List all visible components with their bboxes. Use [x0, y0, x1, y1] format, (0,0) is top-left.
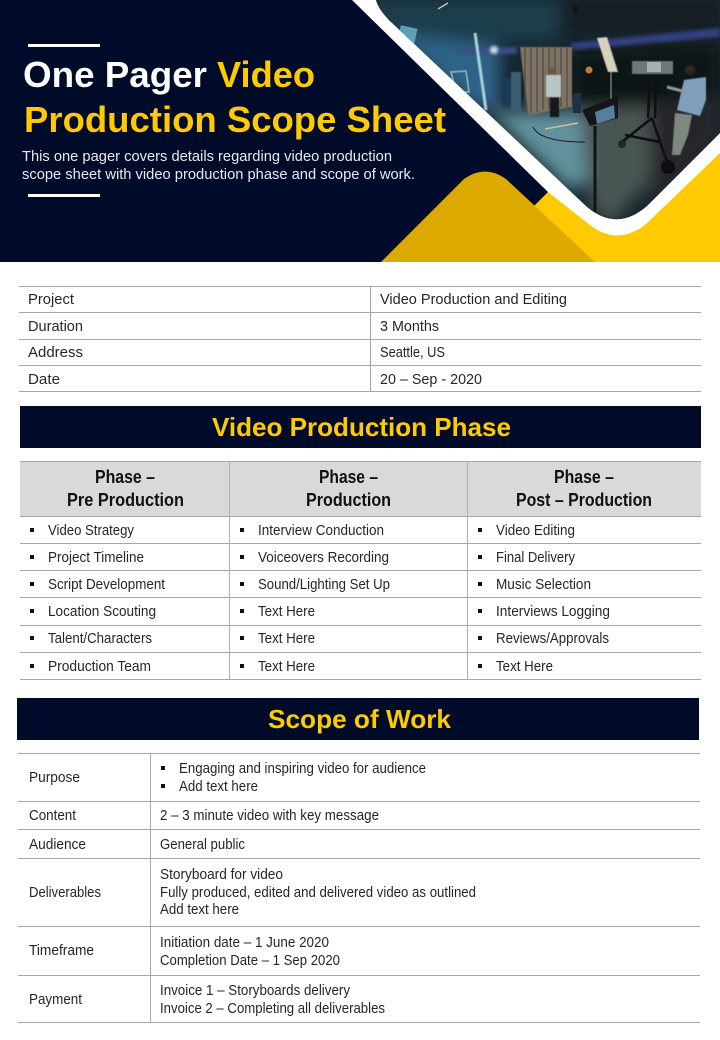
project info table: Seattle, US: [380, 345, 445, 361]
floor glow strip and cables: [545, 123, 578, 129]
row: deliverables: Add text here: [160, 902, 239, 918]
column 2 items: Sound/Lighting Set Up: [258, 577, 390, 593]
column 3 items: [496, 523, 610, 675]
row: timeframe: Timeframe: [29, 943, 94, 959]
project info table: 20 – Sep - 2020: [380, 372, 482, 388]
column 2 items: Text Here: [258, 604, 315, 620]
row: timeframe: Initiation date – 1 June 2020: [160, 935, 329, 951]
project info table: Project: [28, 292, 74, 308]
row: purpose: Purpose: [29, 770, 80, 786]
phase table: [20, 461, 701, 680]
project info table: Video Production and Editing: [380, 292, 567, 308]
project info table: [19, 286, 701, 392]
row: content: 2 – 3 minute video with key message: [160, 808, 379, 824]
bullets: [30, 528, 482, 668]
column 3 items: Final Delivery: [496, 550, 576, 566]
column 1 items: [48, 523, 165, 675]
column 3 items: Interviews Logging: [496, 604, 610, 620]
blurred light areas: [370, 0, 720, 225]
row: audience: [29, 837, 245, 853]
row: payment: Invoice 1 – Storyboards delivery: [160, 983, 351, 999]
gold triangle: [381, 172, 595, 262]
row: purpose: Add text here: [179, 779, 258, 795]
title: Video: [217, 54, 315, 95]
column 2 items: Interview Conduction: [258, 523, 384, 539]
column 3 items: Music Selection: [496, 577, 591, 593]
row: content: [29, 808, 379, 824]
column headers: Production: [306, 490, 391, 510]
row: purpose: [29, 761, 426, 795]
column headers: Phase –: [554, 467, 614, 487]
light pole and ladder: [475, 33, 486, 110]
monitor on stand: [573, 93, 581, 113]
column 2 items: [258, 523, 390, 675]
column headers: Post – Production: [516, 490, 652, 510]
row: deliverables: Deliverables: [29, 885, 101, 901]
row: content: Content: [29, 808, 76, 824]
camera rig: [618, 61, 675, 174]
row: payment: Invoice 2 – Completing all deliverables: [160, 1001, 385, 1017]
curtain: [520, 47, 572, 115]
column 2 items: Text Here: [258, 631, 315, 647]
row: timeframe: [29, 935, 340, 969]
softbox and orange lamp: [597, 37, 618, 72]
white photo frame: [352, 0, 720, 236]
column headers: Pre Production: [67, 490, 184, 510]
column 3 items: Video Editing: [496, 523, 575, 539]
column headers: Phase –: [319, 467, 378, 487]
title: Production Scope Sheet: [24, 99, 446, 140]
ceiling details: [438, 3, 448, 9]
crew: [502, 78, 512, 106]
subtitle: [22, 149, 415, 183]
heading: scope of work: [17, 698, 699, 740]
column 1 items: Script Development: [48, 577, 165, 593]
camera operator: [667, 65, 706, 155]
heading: scope of work: Scope of Work: [268, 704, 452, 734]
heading: video production phase: [20, 406, 701, 448]
project info table: Duration: [28, 319, 83, 335]
bright yellow shape: [525, 140, 720, 262]
presenter: [546, 68, 561, 117]
column 1 items: Project Timeline: [48, 550, 144, 566]
bottom rule: [28, 194, 100, 197]
title: [23, 54, 446, 140]
row: deliverables: [29, 867, 476, 918]
column 1 items: Video Strategy: [48, 523, 135, 539]
purple ceiling band: [570, 28, 720, 50]
column headers: [67, 467, 652, 510]
header banner: [0, 0, 720, 262]
project info table: 3 Months: [380, 319, 439, 335]
heading: video production phase: Video Production Phase: [212, 412, 511, 442]
column 3 items: Reviews/Approvals: [496, 631, 609, 647]
row: audience: General public: [160, 837, 245, 853]
top rule: [28, 44, 100, 47]
row: purpose: Engaging and inspiring video for audience: [179, 761, 426, 777]
row: audience: Audience: [29, 837, 86, 853]
row: payment: Payment: [29, 992, 82, 1008]
column 2 items: Voiceovers Recording: [258, 550, 389, 566]
subtitle: This one pager covers details regarding video production: [22, 149, 392, 165]
column 1 items: Location Scouting: [48, 604, 156, 620]
subtitle: scope sheet with video production phase and scope of work.: [22, 167, 415, 183]
column 1 items: Production Team: [48, 659, 151, 675]
project info table: Date: [28, 372, 60, 388]
column 2 items: Text Here: [258, 659, 315, 675]
row: deliverables: Fully produced, edited and delivered video as outlined: [160, 885, 476, 901]
column 1 items: Talent/Characters: [48, 631, 152, 647]
column 3 items: Text Here: [496, 659, 553, 675]
title: One Pager: [23, 54, 207, 95]
scope of work table: [18, 753, 700, 1022]
row: payment: [29, 983, 385, 1017]
project info table: Address: [28, 345, 83, 361]
photo: film studio: [370, 0, 720, 235]
column headers: Phase –: [95, 467, 155, 487]
row: deliverables: Storyboard for video: [160, 867, 283, 883]
title block: [22, 44, 446, 197]
row: timeframe: Completion Date – 1 Sep 2020: [160, 953, 340, 969]
